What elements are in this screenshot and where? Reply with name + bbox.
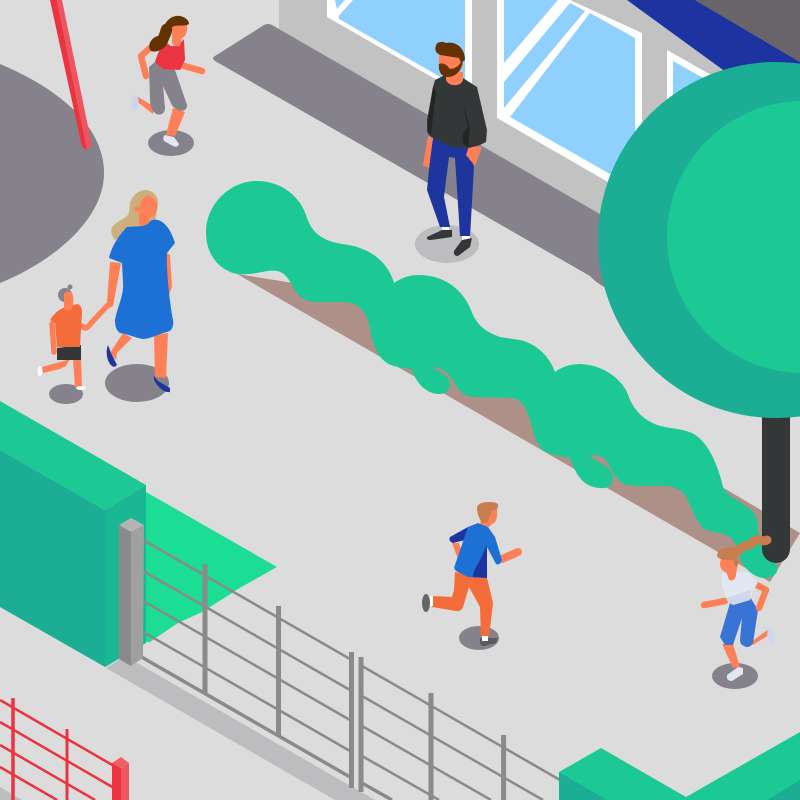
front leg — [722, 644, 740, 668]
man beard — [439, 60, 463, 77]
dress — [109, 220, 175, 339]
posts — [205, 564, 504, 800]
building — [213, 0, 800, 300]
child — [38, 284, 108, 404]
arms — [141, 48, 202, 76]
man — [415, 42, 487, 263]
ponytail — [722, 540, 767, 554]
shirt shading — [726, 590, 751, 605]
back leg — [750, 628, 772, 645]
roof band — [627, 0, 800, 126]
pants — [149, 62, 187, 115]
man neck — [446, 72, 463, 85]
shoes — [107, 345, 170, 392]
box top — [559, 732, 800, 800]
face — [64, 291, 73, 310]
plaza circle — [0, 64, 104, 283]
shoes — [38, 366, 86, 390]
shadow — [712, 663, 758, 689]
gray fence — [119, 518, 560, 800]
arms — [52, 305, 108, 352]
arm — [502, 552, 518, 559]
woman in blue dress — [105, 190, 175, 402]
fence shadow — [106, 656, 375, 800]
box side — [767, 780, 800, 800]
man shadow — [415, 225, 479, 263]
lawn — [146, 492, 277, 642]
shoes — [422, 594, 498, 646]
shirt — [50, 304, 82, 347]
canopy outer — [598, 62, 800, 418]
legs — [42, 359, 82, 387]
woman in red running — [131, 16, 202, 156]
arms — [107, 253, 172, 309]
neck — [725, 568, 737, 581]
shorts — [720, 597, 758, 647]
corner post — [112, 757, 129, 800]
hair — [58, 284, 72, 302]
shirt — [155, 39, 185, 70]
shoes — [727, 627, 776, 681]
arms — [704, 584, 766, 608]
shirt — [454, 523, 502, 578]
posts — [13, 698, 67, 800]
canopy inner — [667, 101, 800, 373]
shirt shading — [473, 545, 487, 578]
hair — [149, 16, 189, 52]
hair — [477, 502, 498, 523]
hair — [111, 190, 158, 240]
back arm — [452, 543, 464, 562]
man shoes — [427, 230, 472, 256]
corner shadow — [0, 787, 22, 800]
window 1 — [327, 0, 472, 100]
neck — [139, 210, 149, 227]
red pole — [50, 0, 92, 150]
face — [720, 555, 738, 573]
tree — [598, 62, 800, 563]
pants — [432, 572, 493, 637]
face — [480, 508, 497, 527]
face — [172, 25, 187, 46]
building wall — [279, 0, 800, 300]
runner in blue — [422, 502, 518, 650]
shadow — [148, 130, 194, 156]
face — [135, 196, 157, 218]
rails — [0, 700, 114, 800]
box side — [105, 485, 146, 667]
plaza circle with red pole — [0, 0, 104, 283]
man hair — [435, 42, 465, 63]
rails — [138, 537, 560, 800]
box top — [0, 401, 146, 510]
green box left — [0, 401, 277, 667]
man sweater — [427, 75, 487, 148]
hedge — [206, 181, 777, 578]
hedge shadow — [237, 274, 800, 582]
shorts — [57, 345, 81, 360]
plinth — [213, 24, 640, 300]
green box bottom right — [559, 732, 800, 800]
legs — [110, 333, 168, 378]
window 2 — [497, 0, 642, 200]
box front — [0, 450, 105, 667]
girl running — [704, 540, 776, 689]
shoes — [131, 95, 179, 147]
shadow — [105, 364, 169, 402]
box front — [559, 772, 607, 800]
legs — [135, 95, 185, 136]
trunk — [762, 400, 790, 563]
man socks — [442, 227, 470, 241]
window 3 — [667, 50, 720, 110]
gate pillar — [119, 518, 144, 666]
shirt — [722, 572, 758, 605]
sweater shading — [428, 87, 470, 147]
shadow — [459, 626, 499, 650]
man hands — [423, 136, 482, 168]
man pants — [427, 138, 474, 237]
man face — [439, 55, 463, 77]
far sleeve — [449, 527, 468, 543]
red fence — [0, 698, 129, 800]
hair — [717, 550, 738, 567]
shadow — [49, 384, 83, 404]
roof top — [695, 0, 800, 62]
